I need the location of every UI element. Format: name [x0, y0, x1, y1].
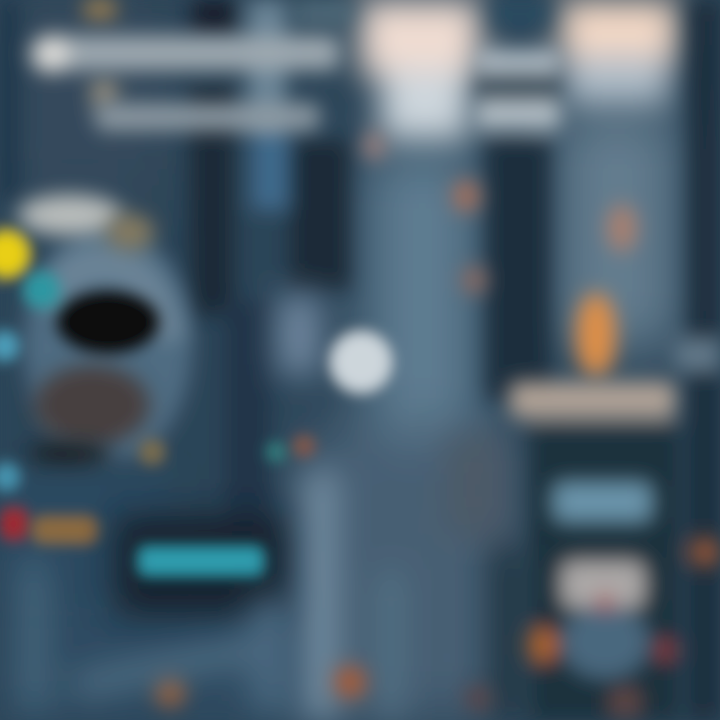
small orange street dots: [155, 666, 490, 710]
right tower and banded sign: [476, 0, 560, 400]
right lower panel: [510, 382, 719, 720]
coloured dots around hood: [0, 230, 315, 544]
lower left pipes: [22, 560, 290, 710]
street haze and lower columns: [278, 295, 522, 720]
heading: blurred white title text: [32, 36, 340, 130]
white circle icon: [330, 331, 392, 393]
right edge dark column: [675, 0, 720, 720]
left building columns: [0, 0, 353, 560]
orange flame and small accents: [364, 132, 637, 377]
teal label panel: [115, 515, 285, 615]
sky: pale peach haze: [360, 0, 678, 140]
hooded figure: [0, 195, 192, 595]
